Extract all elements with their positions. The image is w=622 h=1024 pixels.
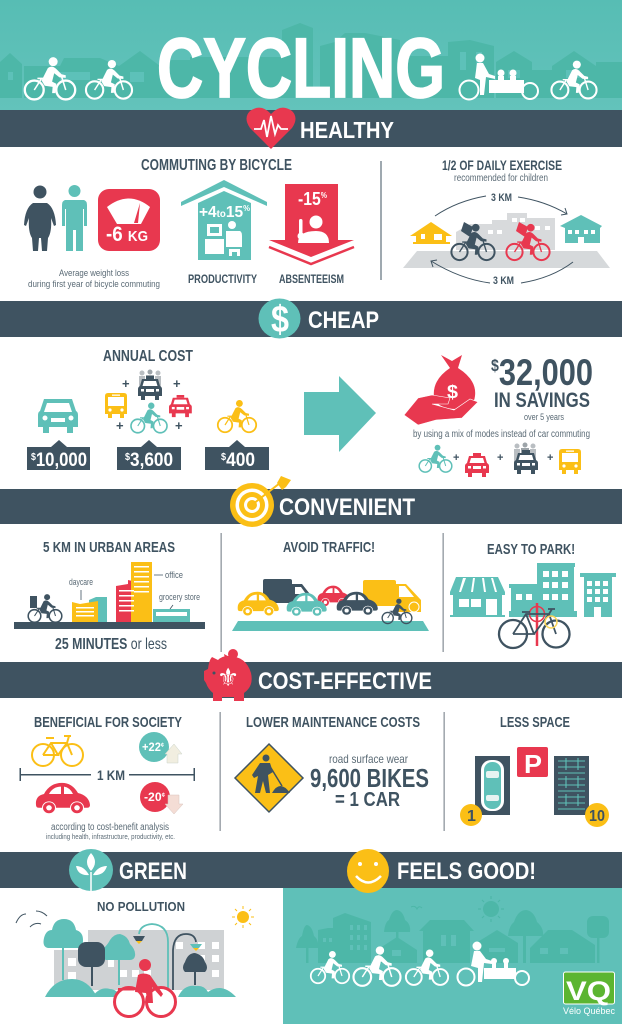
text: average weight loss: during first year of bicycle commuting (28, 279, 160, 289)
heading: cost-effective: COST-EFFECTIVE (258, 668, 432, 695)
badge: minus 20 cents (140, 782, 183, 814)
band: cheap (0, 298, 622, 341)
icon: productivity arrow: +4to15 (199, 204, 244, 221)
icon: plant (69, 849, 113, 892)
lamp posts (139, 924, 196, 990)
teal school (560, 215, 602, 243)
heading: healthy: HEALTHY (300, 117, 394, 143)
price: 10,000: $ (31, 452, 36, 463)
heading: cheap: CHEAP (308, 307, 379, 334)
badge: minus 20 cents: ¢ (162, 793, 166, 799)
plus signs (116, 376, 183, 433)
plus signs: + (116, 418, 124, 433)
price: 400: $ (221, 452, 226, 463)
label: 3 km bottom: 3 KM (493, 275, 514, 287)
buildings (54, 930, 224, 990)
cyclist 3 (406, 949, 448, 985)
badge: plus 22 cents: +22 (142, 740, 162, 754)
diagram: urban destinations (14, 562, 205, 629)
icon: absenteeism arrow: % (321, 191, 327, 200)
text: road surface wear: road surface wear (329, 752, 408, 766)
text: cost-benefit analysis: according to cost-benefit analysis (51, 822, 169, 833)
icons: mix of modes: + (547, 452, 553, 464)
heading: annual cost: ANNUAL COST (103, 348, 193, 365)
badge: 1: 1 (467, 808, 476, 825)
text: average weight loss: Average weight loss (59, 268, 129, 278)
icon: teal car (38, 399, 78, 433)
label: grocery store: grocery store (159, 592, 200, 602)
badge: 10: 10 (589, 808, 605, 825)
cargo bike (460, 54, 538, 100)
cyclist (382, 599, 412, 624)
label: absenteeism: ABSENTEEISM (279, 272, 344, 286)
icon: absenteeism arrow (269, 184, 354, 264)
icon: parking sign: P (524, 749, 542, 779)
heading: easy to park: EASY TO PARK! (487, 541, 575, 558)
label: productivity: PRODUCTIVITY (188, 272, 257, 286)
yellow house (410, 222, 452, 244)
trees (296, 925, 318, 948)
heading: no pollution: NO POLLUTION (97, 899, 185, 914)
logo: Vélo Québec: VQ (566, 976, 611, 1006)
divider (380, 161, 382, 280)
price: 3,600: 3,600 (130, 450, 173, 471)
badge: plus 22 cents (139, 732, 182, 763)
red cyclist (506, 224, 550, 260)
buildings (509, 563, 616, 617)
icon: teal bike (131, 403, 167, 433)
icon: red taxi (169, 395, 192, 417)
cyclist 4 (551, 61, 597, 98)
heading: commuting by bicycle: COMMUTING BY BICYCLE (141, 157, 292, 174)
birds (16, 911, 47, 927)
text: 25 minutes or less: 25 MINUTES or less (55, 636, 167, 653)
icon: red car (36, 783, 90, 814)
buildings (318, 913, 371, 963)
icon: parking sign (517, 747, 548, 779)
badge: minus 20 cents: -20 (144, 790, 161, 804)
gray buildings (456, 213, 555, 250)
dark truck (263, 579, 313, 603)
icons: mix of modes: + (497, 452, 503, 464)
heading: convenient: CONVENIENT (279, 494, 415, 521)
icon: yellow bus (105, 393, 127, 418)
price: 400 (205, 440, 269, 471)
band: convenient (0, 476, 622, 527)
cyclist 1 (25, 57, 75, 99)
logo: Vélo Québec (563, 972, 615, 1017)
plus signs: + (175, 418, 183, 433)
illustration: feels good skyline (296, 896, 609, 963)
icon: scale minus 6 kg: -6 KG (106, 223, 148, 246)
label: daycare: daycare (69, 577, 93, 587)
price: 400: 400 (226, 450, 255, 471)
icon: hand with money bag (404, 355, 478, 425)
icon: yellow bike (218, 400, 256, 432)
icon: slim person (62, 185, 87, 251)
heading: 5 km in urban areas: 5 KM IN URBAN AREAS (43, 539, 175, 556)
logo: Vélo Québec: Vélo Québec (563, 1006, 615, 1017)
icons: mix of modes (419, 442, 581, 477)
icon: piggy bank (204, 649, 252, 701)
heading: beneficial for society: BENEFICIAL FOR SOCIETY (34, 714, 182, 731)
heading: less space: LESS SPACE (500, 714, 570, 731)
feels good cyclists (311, 942, 529, 986)
cyclist 2 (353, 946, 401, 986)
panel: feels good background (283, 888, 622, 1024)
band: green and feels good (0, 849, 622, 893)
icon: piggy bank: ⚜ (217, 663, 239, 692)
icon: dollar (258, 298, 300, 341)
teal car (287, 593, 327, 616)
figure: 32,000: $ (491, 356, 499, 375)
road (403, 251, 610, 268)
icon: road work sign (235, 744, 303, 812)
dark car (337, 592, 378, 615)
badge: plus 22 cents: ¢ (161, 743, 165, 749)
dividers (220, 533, 444, 652)
text: over 5 years: over 5 years (524, 412, 564, 422)
diagram: home to school loop (403, 192, 610, 287)
plus signs: + (122, 376, 130, 391)
icon: scale minus 6 kg (98, 189, 160, 251)
big arrow (304, 376, 376, 452)
band: cost-effective (0, 649, 622, 701)
red car (318, 586, 350, 606)
illustration: clean city (16, 906, 254, 1016)
badge: 1 (460, 804, 482, 826)
icon: target (230, 476, 291, 527)
icon: heavier person (24, 186, 56, 251)
icon: smiley (347, 849, 389, 893)
yellow car (238, 592, 279, 616)
price: 10,000 (27, 440, 90, 471)
figure: 9,600 bikes: 9,600 BIKES (310, 763, 429, 793)
header cyclists (25, 54, 597, 100)
text: recommended for children: recommended for children (454, 173, 548, 184)
cyclist 2 (86, 60, 132, 99)
ground mounds (45, 979, 236, 997)
parking spot: car (475, 756, 510, 815)
shop (450, 577, 505, 617)
cargo bike (458, 942, 529, 986)
label: 3 km top: 3 KM (491, 192, 512, 204)
price: 3,600 (117, 440, 181, 471)
bird (411, 906, 422, 909)
text: in savings: IN SAVINGS (494, 389, 590, 412)
badge: 10 (585, 803, 609, 827)
icon: productivity arrow: % (243, 204, 250, 213)
icons: mix of modes: + (453, 452, 459, 464)
price: 10,000: 10,000 (36, 450, 87, 471)
icon: dollar: $ (271, 299, 289, 341)
text: average weight loss (28, 268, 160, 289)
sun (232, 906, 254, 928)
heading: green: GREEN (119, 858, 187, 885)
dividers (220, 712, 445, 831)
icon: yellow bicycle (32, 736, 83, 766)
header background (0, 0, 622, 111)
heading: half of daily exercise: 1/2 OF DAILY EXERCISE (442, 157, 562, 173)
icon: productivity arrow (181, 180, 267, 260)
icon: carpool (138, 370, 162, 400)
figure: 32,000: 32,000 (499, 352, 593, 393)
figure: 1 car: = 1 CAR (335, 789, 400, 811)
red cyclist (114, 959, 176, 1016)
header skyline (0, 23, 622, 98)
yellow truck (363, 580, 421, 612)
icon: heart (246, 108, 296, 149)
dark cyclist (451, 224, 495, 260)
text: including: including health, infrastructure, productivity, etc. (46, 834, 175, 841)
cyclist 1 (311, 951, 349, 983)
heading: avoid traffic: AVOID TRAFFIC! (283, 539, 375, 556)
price: 3,600: $ (125, 452, 130, 463)
illustration: shops and bike rack (450, 563, 616, 648)
heading: lower maintenance costs: LOWER MAINTENANCE COSTS (246, 714, 420, 731)
sun (478, 896, 504, 922)
parking spot: ten bikes (554, 756, 589, 815)
trees (44, 919, 207, 986)
label: office: office (165, 570, 183, 580)
title: CYCLING (157, 21, 445, 115)
icon: absenteeism arrow: -15 (298, 189, 324, 209)
heading: feels good: FEELS GOOD! (397, 858, 536, 885)
icon: hand with money bag: $ (447, 382, 458, 402)
illustration: traffic jam (232, 579, 429, 631)
band: healthy (0, 108, 622, 149)
plus signs: + (173, 376, 181, 391)
arrows (431, 196, 573, 283)
scale: 1 km: 1 KM (97, 767, 125, 783)
